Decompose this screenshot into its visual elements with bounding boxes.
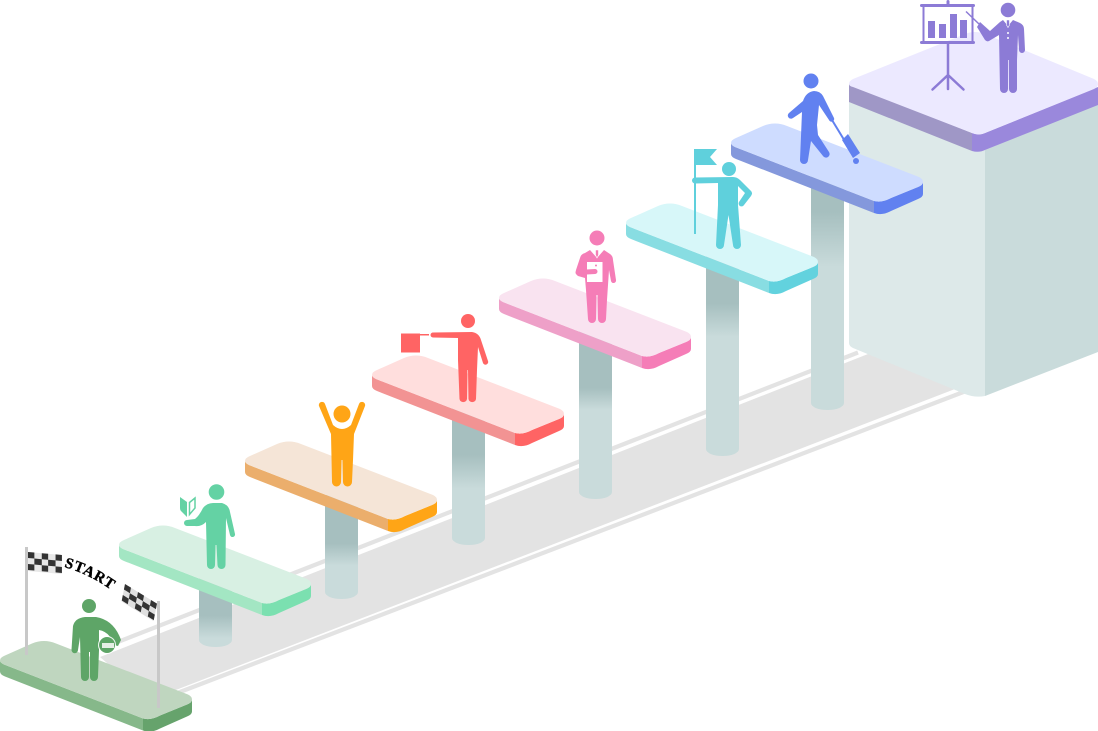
platform: red step [372, 356, 564, 446]
icon: flag [694, 149, 717, 234]
figure: person with cyan flag [692, 149, 752, 249]
platform: start step [0, 641, 192, 731]
figure: traveller with suitcase [788, 74, 860, 164]
left flag pole [25, 547, 28, 655]
goal tower [849, 32, 1098, 397]
left checkered flag [28, 552, 62, 574]
platform: mint step [119, 526, 311, 616]
tower right face [985, 104, 1098, 396]
icon: clipboard [578, 262, 602, 282]
figure: person cheering [319, 402, 365, 486]
start banner [25, 547, 160, 708]
figure: presenter with chart board [920, 0, 1025, 93]
tower left face [849, 100, 985, 397]
column 4 [579, 320, 612, 499]
column 2 [325, 490, 358, 599]
figure: person with clipboard [576, 230, 616, 323]
tower top face [849, 32, 1098, 134]
icon: suitcase [832, 120, 860, 164]
column 1 [199, 570, 232, 647]
figure: beginner with leaf mark [180, 484, 235, 569]
start text: START [64, 558, 116, 589]
platform: orange step [245, 442, 437, 532]
platform: cyan step [626, 204, 818, 294]
tower band right [972, 87, 1098, 152]
tower band left [849, 84, 972, 151]
icon: helmet [98, 636, 116, 654]
column 3 [452, 400, 485, 545]
right flag pole [157, 601, 160, 708]
column 5 [706, 245, 739, 456]
road [100, 352, 966, 700]
right checkered flag [122, 584, 157, 621]
platform: pink step [499, 278, 691, 369]
column 6 [811, 170, 844, 410]
figure: person with red flag [401, 314, 488, 402]
figure: person holding helmet [72, 599, 121, 681]
icon: beginner mark [180, 497, 195, 517]
icon: red flag [401, 334, 429, 352]
icon: chart board [920, 0, 975, 90]
platform: blue step [731, 124, 923, 214]
